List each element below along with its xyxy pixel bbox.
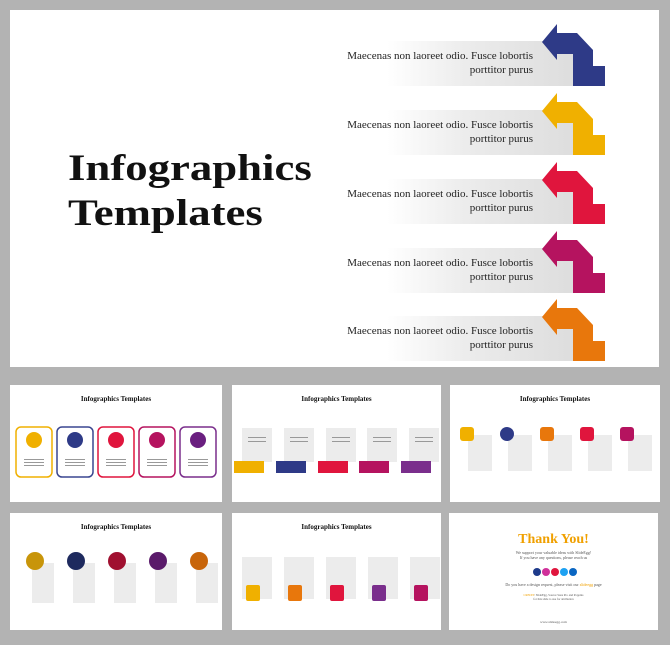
thumb 3 (450, 385, 660, 502)
step texts: porttitor purus (470, 133, 533, 145)
step 5 band (387, 316, 583, 361)
title: Infographics (68, 148, 312, 189)
thumb 6: thank you: If you have any questions, please reach us (520, 555, 587, 560)
thumb 6: thank you: www.slideegg.com (540, 620, 567, 624)
step texts (347, 50, 533, 351)
main slide (10, 10, 659, 367)
thumb 6: thank you: Thank You! (518, 532, 589, 547)
title: Templates (68, 193, 263, 234)
step texts: Maecenas non laoreet odio. Fusce lobortis (347, 257, 533, 269)
thumb 6: thank you (449, 513, 658, 630)
arrows (542, 24, 605, 361)
thumb 2 (232, 385, 441, 502)
step texts: Maecenas non laoreet odio. Fusce lobortis (347, 119, 533, 131)
thumb 1 (10, 385, 222, 502)
thumb 6: thank you: for this slide to use for attribution (533, 597, 574, 601)
thumb 4: Infographics Templates (81, 523, 151, 531)
step texts: Maecenas non laoreet odio. Fusce lobortis (347, 50, 533, 62)
step 1 band (387, 41, 583, 86)
step texts: porttitor purus (470, 271, 533, 283)
thumb 4 (10, 513, 222, 630)
thumb 6: thank you: CREDIT: SlideEgg, Source Sans Pro and Poppins (524, 593, 583, 597)
thumb 5 (232, 513, 441, 630)
step 2 band (387, 110, 583, 155)
thumb 6: thank you: Do you have a design request, please visit our slideegg page (505, 582, 602, 587)
step 4 band (387, 248, 583, 293)
thumb 2: Infographics Templates (301, 395, 372, 403)
step texts: porttitor purus (470, 64, 533, 76)
title (68, 148, 312, 234)
thumb 5: Infographics Templates (301, 523, 372, 531)
step texts: Maecenas non laoreet odio. Fusce lobortis (347, 188, 533, 200)
thumb 1: Infographics Templates (81, 395, 151, 403)
step 3 band (387, 179, 583, 224)
thumb 6: thank you: We support your valuable ideas with SlideEgg! (516, 550, 591, 555)
step texts: porttitor purus (470, 202, 533, 214)
step texts: Maecenas non laoreet odio. Fusce lobortis (347, 325, 533, 337)
thumb 3: Infographics Templates (520, 395, 590, 403)
step texts: porttitor purus (470, 339, 533, 351)
